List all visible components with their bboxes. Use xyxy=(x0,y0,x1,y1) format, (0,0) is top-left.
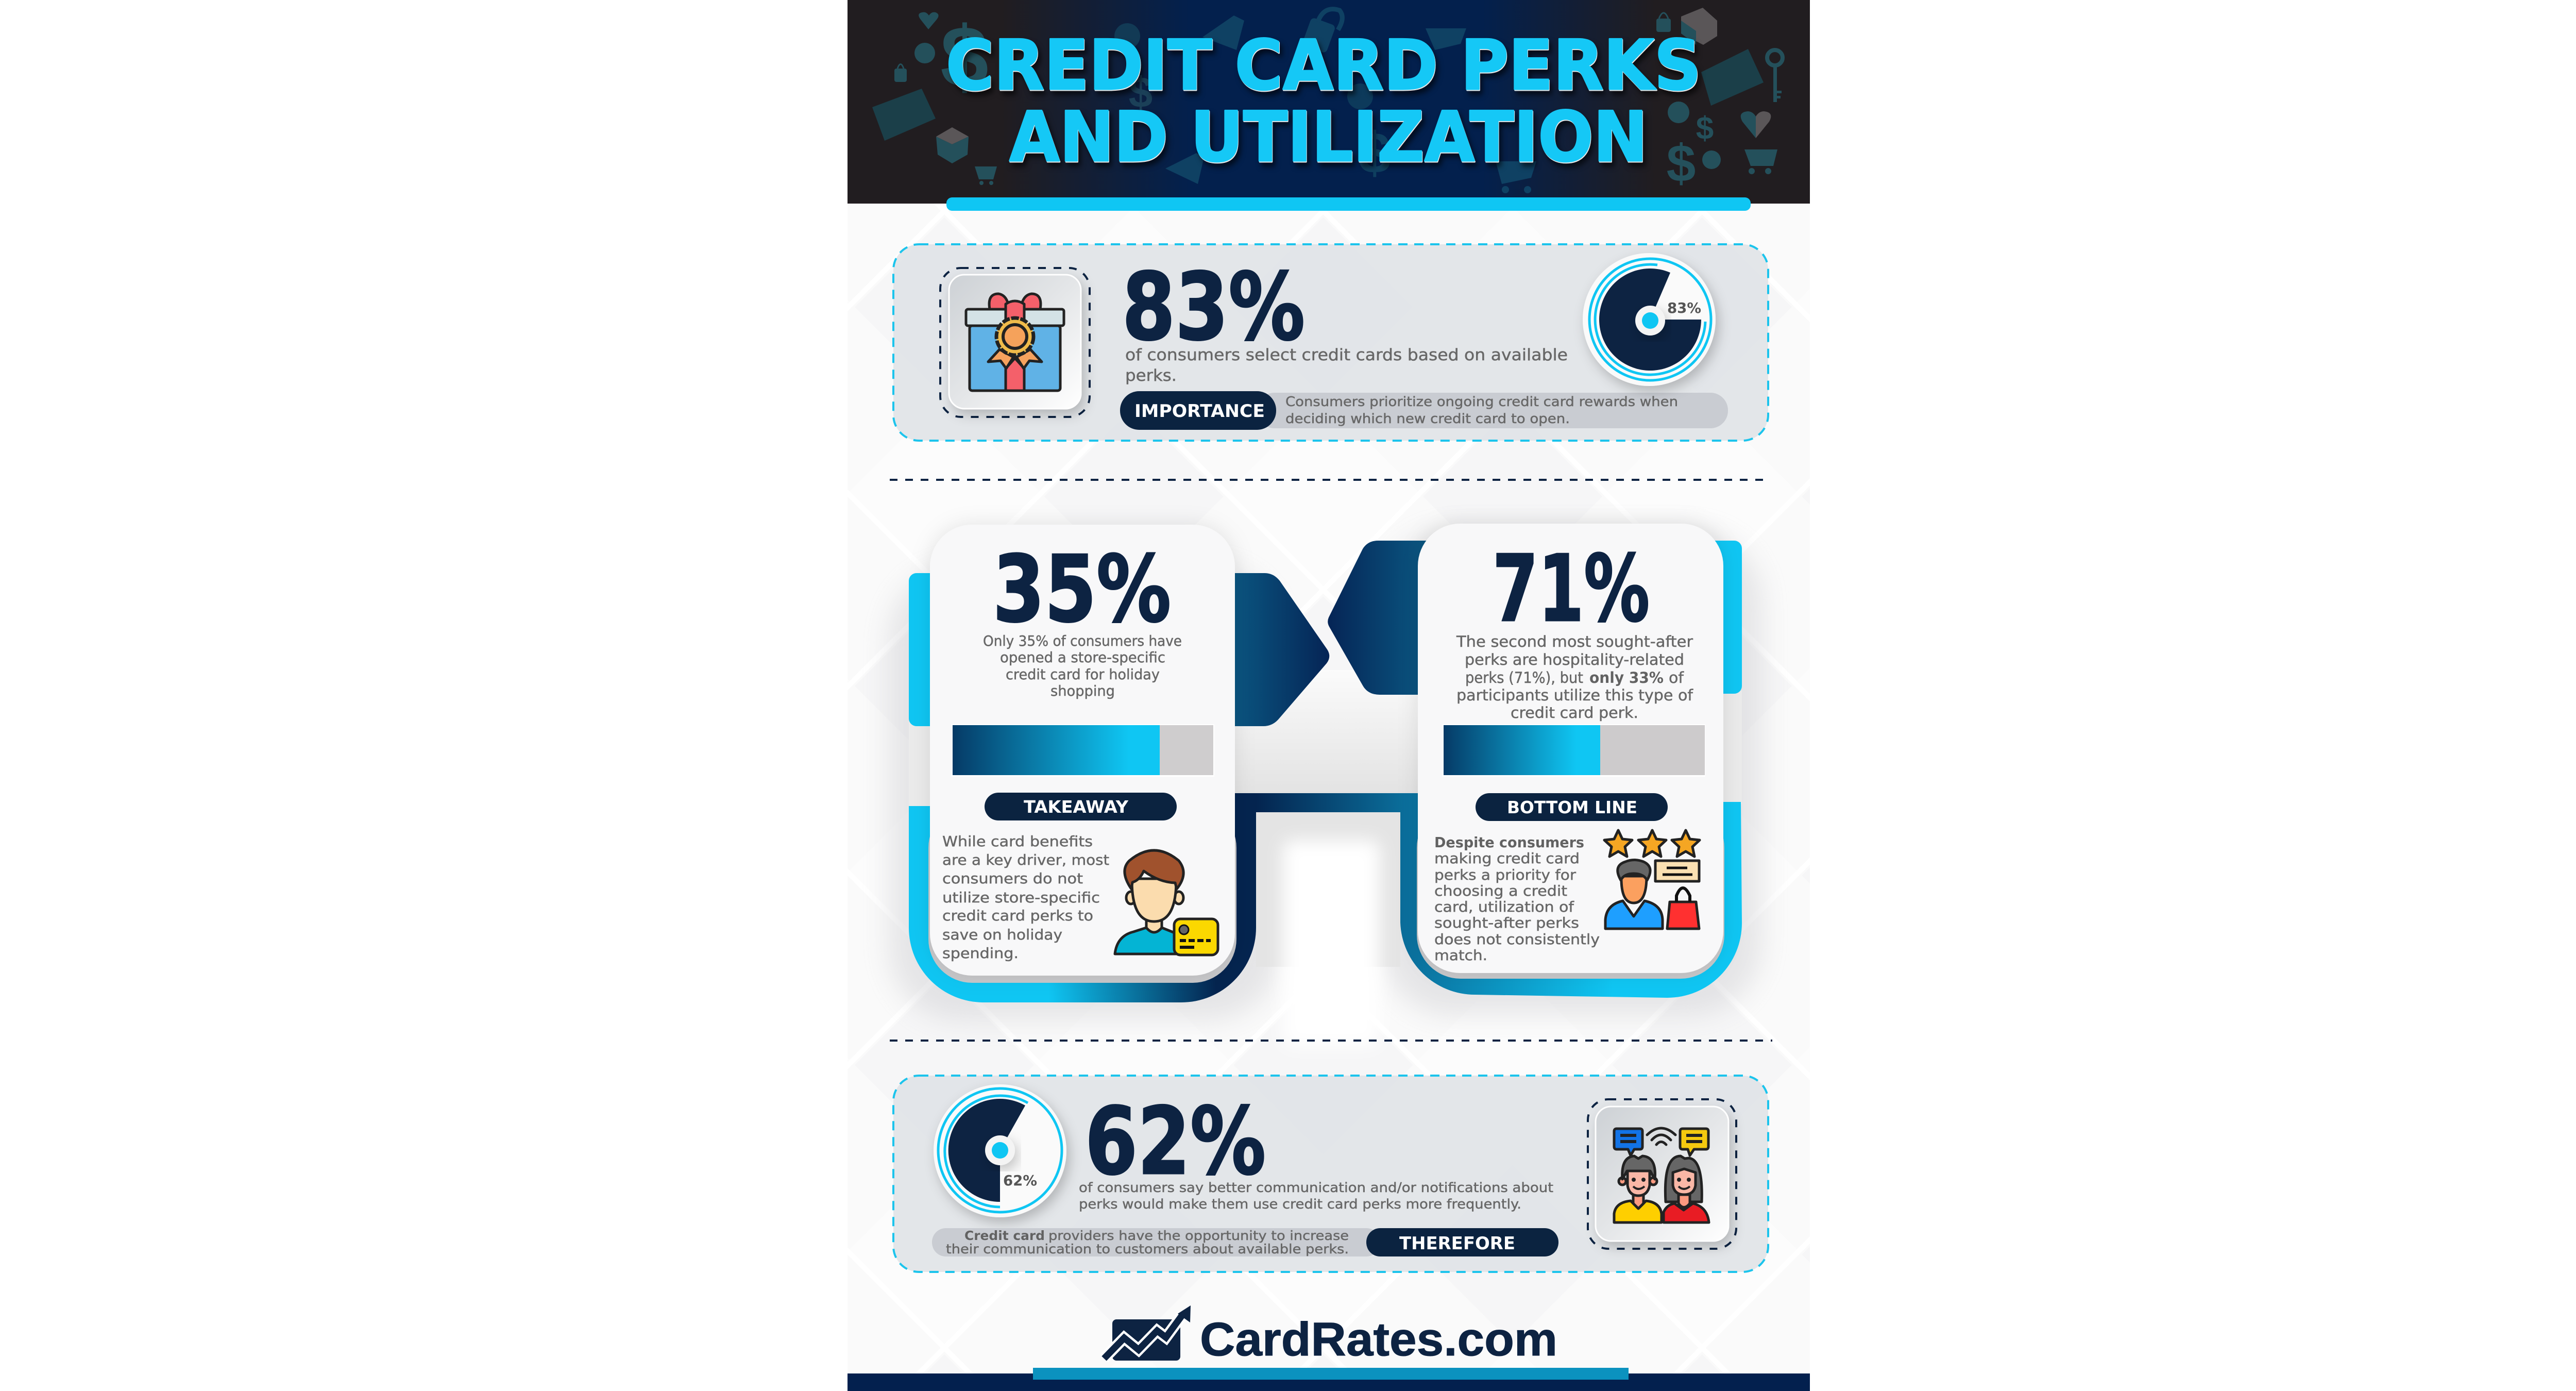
white inset block xyxy=(1283,840,1380,1046)
header dollar signs: $ xyxy=(940,8,989,105)
progress bar 35% xyxy=(951,724,1214,777)
header dollar signs xyxy=(940,8,1714,193)
icon: rising chart on card xyxy=(1104,1305,1191,1361)
stat description: opened a store-specific xyxy=(1000,649,1165,666)
icon: couple card frame xyxy=(1588,1099,1736,1249)
side bands beside cards xyxy=(909,691,1742,807)
title: AND UTILIZATION xyxy=(1009,97,1648,177)
importance note bar xyxy=(1257,393,1728,428)
bottom line pill xyxy=(1476,793,1668,821)
stat description: credit card for holiday xyxy=(1006,666,1160,683)
header banner xyxy=(848,0,1810,204)
stat description: The second most sought-after xyxy=(1456,633,1693,650)
stat description xyxy=(1456,633,1693,722)
big stat 71%: 71% xyxy=(1493,535,1650,642)
frame: U-shaped connector linking both cards xyxy=(909,793,1742,1002)
header accent bar xyxy=(946,197,1751,211)
takeaway text: are a key driver, most xyxy=(942,851,1109,868)
takeaway pill xyxy=(985,793,1177,820)
arrow: left card pointing right xyxy=(1226,573,1329,726)
stat description: shopping xyxy=(1050,682,1115,699)
stat description: perks. xyxy=(1125,366,1177,385)
importance pill xyxy=(1120,391,1276,430)
page background xyxy=(848,204,1810,1391)
bottom line text: sought-after perks xyxy=(1434,914,1579,931)
stat description xyxy=(983,632,1182,699)
therefore note bar xyxy=(932,1228,1380,1256)
header decorative icons left xyxy=(872,12,997,185)
logo: CardRates.com xyxy=(1104,1305,1557,1366)
panel: takeaway card 35% xyxy=(928,525,1236,983)
bottom line pill: BOTTOM LINE xyxy=(1507,797,1637,817)
bottom line text: card, utilization of xyxy=(1434,898,1574,915)
takeaway text: spending. xyxy=(942,945,1019,962)
panel: bottom line card 71% xyxy=(1417,524,1724,979)
big stat 83%: 83% xyxy=(1122,254,1305,361)
stat description: of xyxy=(1669,669,1684,686)
stat description: perks would make them use credit card perks more frequently. xyxy=(1079,1197,1521,1212)
stat description: perks are hospitality-related xyxy=(1465,651,1684,668)
stat description: participants utilize this type of xyxy=(1456,686,1693,704)
header dollar signs: $ xyxy=(1667,134,1696,193)
big stat 35%: 35% xyxy=(993,536,1171,643)
footer bar xyxy=(848,1368,1810,1391)
importance note bar: Consumers prioritize ongoing credit card rewards when xyxy=(1285,394,1678,410)
header decorative icons centre xyxy=(1114,9,1536,193)
header dollar signs: $ xyxy=(1129,68,1153,116)
takeaway text: save on holiday xyxy=(942,926,1062,943)
icon: couple talking xyxy=(1614,1128,1709,1222)
panel: therefore 62% xyxy=(893,1076,1768,1272)
title: CREDIT CARD PERKS xyxy=(946,25,1701,106)
right cyan tab xyxy=(1700,541,1742,694)
therefore note bar: Credit card xyxy=(964,1228,1045,1243)
bottom line text xyxy=(1434,834,1600,964)
stat description: perks (71%), but xyxy=(1465,669,1583,686)
donut chart 83% xyxy=(1583,253,1716,386)
donut chart 62%: 62% xyxy=(1003,1172,1037,1189)
header dollar signs: $ xyxy=(1359,121,1391,185)
icon: gift card frame xyxy=(940,268,1090,417)
takeaway text xyxy=(942,833,1109,962)
importance note bar: deciding which new credit card to open. xyxy=(1285,411,1570,427)
takeaway text: While card benefits xyxy=(942,833,1093,850)
therefore pill xyxy=(1366,1228,1558,1256)
therefore note bar: their communication to customers about available perks. xyxy=(946,1242,1349,1256)
header dollar signs: $ xyxy=(1696,111,1714,146)
stat description xyxy=(1079,1180,1553,1212)
big stat 62%: 62% xyxy=(1085,1088,1266,1196)
stat description: credit card perk. xyxy=(1511,704,1638,722)
divider xyxy=(890,1040,1772,1042)
bottom line text: making credit card xyxy=(1434,850,1580,867)
left cyan tab xyxy=(909,573,950,726)
arrow: right card pointing left xyxy=(1328,541,1427,695)
donut chart 62% xyxy=(934,1084,1066,1217)
progress bar 71% xyxy=(1442,724,1705,777)
stat description: Only 35% of consumers have xyxy=(983,632,1182,649)
stat description: of consumers select credit cards based on available xyxy=(1125,346,1568,364)
inset shadow below connector xyxy=(1256,812,1400,967)
icon: shopper with star rating xyxy=(1604,830,1700,929)
takeaway text: utilize store-specific xyxy=(942,889,1100,906)
icon: gift box xyxy=(966,294,1064,391)
divider xyxy=(890,479,1768,481)
connector band between arrows xyxy=(1235,670,1419,793)
bottom line text: Despite consumers xyxy=(1434,834,1584,851)
takeaway text: credit card perks to xyxy=(942,907,1093,924)
soft shadows behind central cards xyxy=(889,531,1762,1020)
importance pill: IMPORTANCE xyxy=(1134,401,1265,422)
wordmark: CardRates.com xyxy=(1200,1313,1557,1366)
bottom line text: match. xyxy=(1434,947,1487,964)
stat description: of consumers say better communication and/or notifications about xyxy=(1079,1180,1553,1196)
stat description: only 33% xyxy=(1589,669,1664,686)
therefore pill: THEREFORE xyxy=(1399,1233,1515,1254)
bottom line text: choosing a credit xyxy=(1434,882,1567,899)
bottom line text: does not consistently xyxy=(1434,931,1600,948)
stat description xyxy=(1125,346,1568,385)
header decorative icons right xyxy=(1656,8,1783,174)
takeaway text: consumers do not xyxy=(942,870,1083,887)
therefore note bar: providers have the opportunity to increase xyxy=(1048,1228,1349,1243)
icon: person with credit card xyxy=(1115,850,1218,955)
donut chart 83%: 83% xyxy=(1667,299,1701,316)
panel: importance 83% xyxy=(893,244,1768,441)
bottom line text: perks a priority for xyxy=(1434,866,1577,883)
takeaway pill: TAKEAWAY xyxy=(1024,797,1129,817)
title xyxy=(946,25,1701,177)
